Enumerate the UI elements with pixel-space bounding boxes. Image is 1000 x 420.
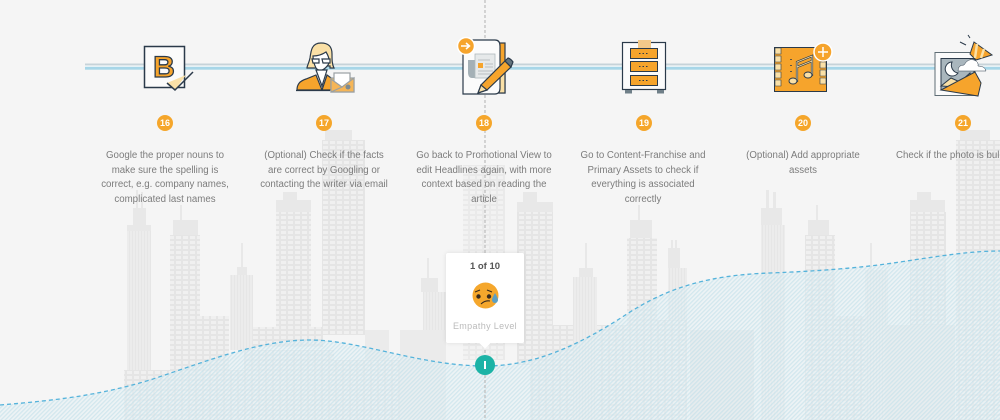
step text 19: correctly (625, 194, 661, 205)
step text 18: article (471, 194, 497, 205)
step badge 21: 21 (958, 118, 968, 128)
step badge 19 (636, 115, 652, 131)
step text 16: Google the proper nouns to (106, 150, 224, 161)
teal marker (475, 355, 495, 375)
step text 18 (416, 150, 552, 205)
step text 16: correct, e.g. company names, (101, 179, 229, 190)
step text 16: make sure the spelling is (112, 165, 218, 176)
step text 17 (260, 150, 388, 190)
step text 20: assets (789, 165, 817, 176)
step badge 20: 20 (798, 118, 808, 128)
step text 17: are correct by Googling or (268, 165, 380, 176)
step badge 18: 18 (479, 118, 489, 128)
step badge 18 (476, 115, 492, 131)
step text 17: contacting the writer via email (260, 179, 388, 190)
step text 19: Primary Assets to check if (588, 165, 698, 176)
step badge 20 (795, 115, 811, 131)
step text 17: (Optional) Check if the facts (264, 150, 384, 161)
step text 20: (Optional) Add appropriate (746, 150, 860, 161)
emoji: sad face (472, 282, 498, 308)
step text 19 (581, 150, 705, 205)
empathy curve line (0, 251, 1000, 405)
step text 19: Go to Content-Franchise and (581, 150, 705, 161)
tooltip: empathy level (446, 253, 524, 343)
step text 16 (101, 150, 229, 205)
step text 16: complicated last names (114, 194, 216, 205)
step badge 17: 17 (319, 118, 329, 128)
tooltip pointer (479, 337, 491, 349)
step text 20 (746, 150, 860, 176)
step badge 16 (157, 115, 173, 131)
tooltip score: 1 of 10 (470, 261, 500, 272)
step badge 19: 19 (639, 118, 649, 128)
step text 21: Check if the photo is bull (896, 150, 1000, 161)
step badge 17 (316, 115, 332, 131)
step badge 21 (955, 115, 971, 131)
step badge 16: 16 (160, 118, 170, 128)
step text 18: context based on reading the (422, 179, 546, 190)
icon: spelling B check: B (153, 51, 175, 84)
step text 18: Go back to Promotional View to (416, 150, 552, 161)
step text 19: everything is associated (591, 179, 695, 190)
step text 18: edit Headlines again, with more (416, 165, 552, 176)
tooltip label: Empathy Level (453, 321, 517, 331)
